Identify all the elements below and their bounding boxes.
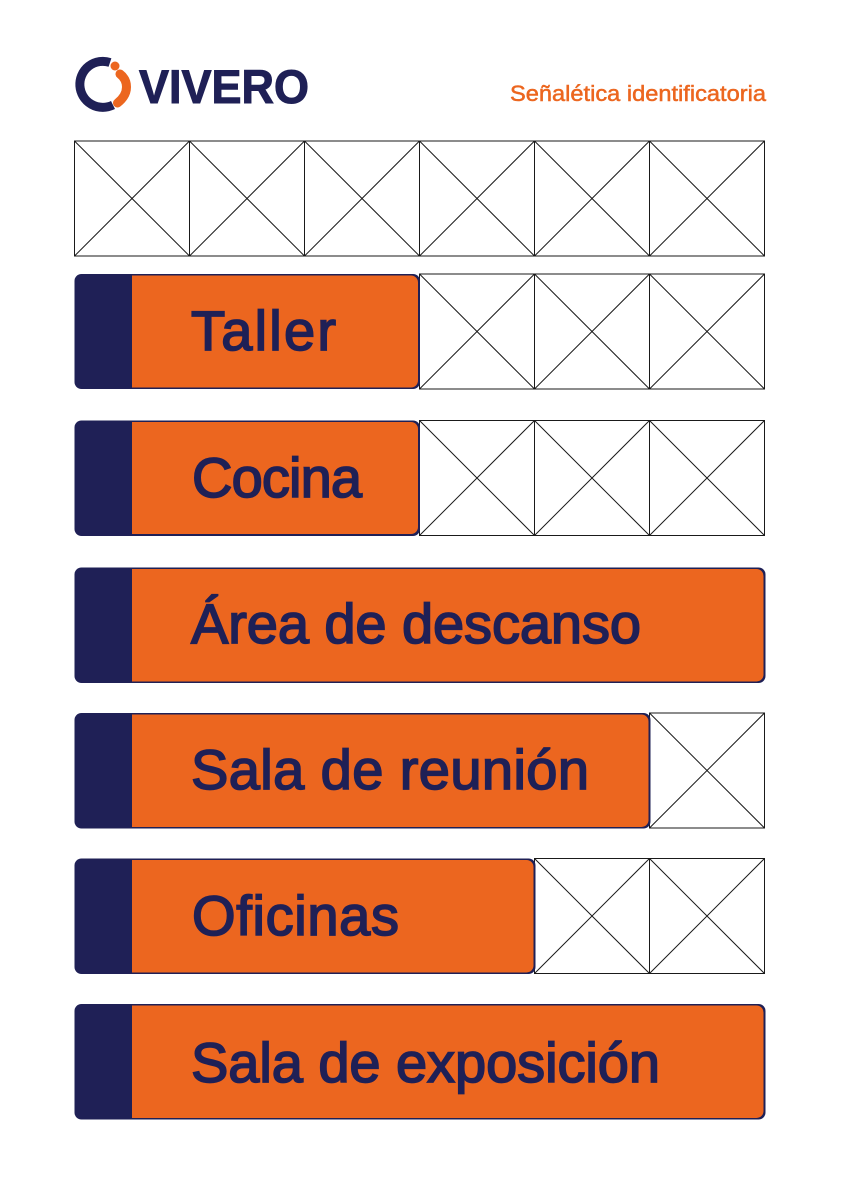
sign: Sala de reunión: Sala de reunión bbox=[191, 738, 589, 801]
icon: logo ring bbox=[80, 61, 113, 107]
sign: Cocina bbox=[74, 420, 764, 536]
sign: Oficinas bbox=[74, 858, 764, 974]
sign: Taller: Taller bbox=[191, 299, 336, 362]
sign: Taller bbox=[74, 274, 764, 389]
sign: Área de descanso: Área de descanso bbox=[191, 592, 641, 655]
sign: Área de descanso bbox=[74, 568, 766, 683]
logo wordmark: VIVERO bbox=[139, 60, 309, 113]
sign: Oficinas: Oficinas bbox=[192, 884, 399, 947]
empty grid row bbox=[74, 141, 764, 256]
sign: Sala de exposición: Sala de exposición bbox=[191, 1031, 660, 1094]
logo bbox=[80, 60, 309, 113]
heading: document subtitle: Señalética identificatoria bbox=[510, 81, 767, 106]
sign: Cocina: Cocina bbox=[192, 446, 363, 509]
sign: Sala de reunión bbox=[74, 713, 764, 828]
icon: logo orange arc and dot bbox=[110, 62, 126, 103]
sign: Sala de exposición bbox=[74, 1004, 766, 1120]
